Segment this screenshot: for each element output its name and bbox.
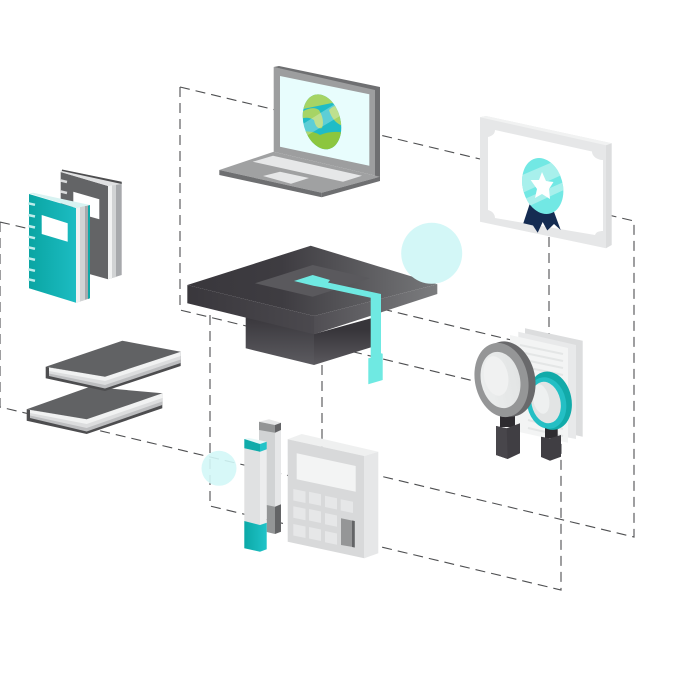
- text lines on sheet: [520, 345, 563, 436]
- certificate frame: [480, 116, 612, 248]
- middle sheet: [518, 332, 576, 439]
- upper notebook cover: [46, 341, 181, 377]
- icon: certificate: [480, 116, 612, 248]
- gray notebook pages: [108, 182, 122, 279]
- certificate side: [606, 143, 612, 248]
- icon: document stack: [510, 328, 583, 443]
- front sheet: [510, 335, 568, 443]
- teal notebook pages: [76, 205, 90, 303]
- icon: teal notebook: [28, 193, 90, 303]
- icon: laptop: [219, 66, 380, 197]
- teal marker body: [244, 448, 260, 525]
- icon: upper flat notebook: [46, 341, 181, 391]
- tassel: [294, 275, 383, 384]
- circle: large mint accent: [401, 223, 462, 284]
- gray marker body: [259, 425, 275, 510]
- small magnifier lens: [527, 379, 565, 426]
- back sheet: [525, 328, 583, 437]
- calculator side: [364, 452, 378, 558]
- gray notebook cover: [61, 172, 108, 279]
- small magnifier ring: [523, 367, 577, 434]
- teal notebook label: [42, 215, 68, 242]
- gray marker cap: [259, 419, 281, 425]
- trackpad: [263, 172, 309, 184]
- gray notebook rings: [61, 180, 67, 193]
- cap base: [246, 310, 314, 365]
- certificate paper: [488, 130, 603, 235]
- calculator top: [288, 434, 378, 456]
- gray notebook label: [73, 192, 99, 219]
- ribbon: [523, 203, 561, 233]
- icon: gray marker: [259, 419, 281, 534]
- icon: gray notebook: [61, 170, 122, 279]
- large magnifier lens: [476, 348, 525, 412]
- small magnifier handle: [545, 426, 558, 438]
- calculator front: [288, 439, 364, 558]
- calculator equals key: [341, 518, 354, 547]
- icon: lower flat notebook: [27, 387, 162, 434]
- mortarboard top: [187, 246, 437, 316]
- lower notebook cover: [27, 387, 162, 419]
- teal notebook rings: [28, 203, 35, 281]
- keyboard: [253, 156, 362, 182]
- large magnifier ring: [473, 336, 542, 422]
- teal notebook cover: [29, 194, 76, 303]
- laptop screen: [280, 76, 369, 166]
- icon: small teal magnifier: [522, 367, 577, 461]
- upper notebook pages: [49, 352, 181, 388]
- large magnifier handle: [500, 414, 515, 427]
- globe on screen: [302, 94, 342, 150]
- icon: large gray magnifier: [468, 336, 542, 459]
- calculator display: [297, 453, 356, 492]
- teal marker cap: [244, 438, 267, 444]
- medal: [516, 153, 569, 219]
- icon: graduation cap: [187, 246, 437, 384]
- gray marker tip: [267, 505, 275, 534]
- icon: teal marker: [244, 438, 267, 552]
- icon: calculator: [288, 434, 378, 558]
- circle: small mint accent: [202, 451, 236, 486]
- mortarboard centre panel: [255, 265, 370, 297]
- lower notebook pages: [30, 393, 162, 432]
- laptop base: [219, 152, 380, 193]
- illustration: isometric education scene: [0, 66, 635, 591]
- star: [531, 172, 554, 199]
- calculator buttons: [293, 489, 353, 545]
- dashed connector lines: [0, 87, 634, 590]
- teal marker base: [244, 521, 267, 552]
- laptop lid: [274, 67, 380, 177]
